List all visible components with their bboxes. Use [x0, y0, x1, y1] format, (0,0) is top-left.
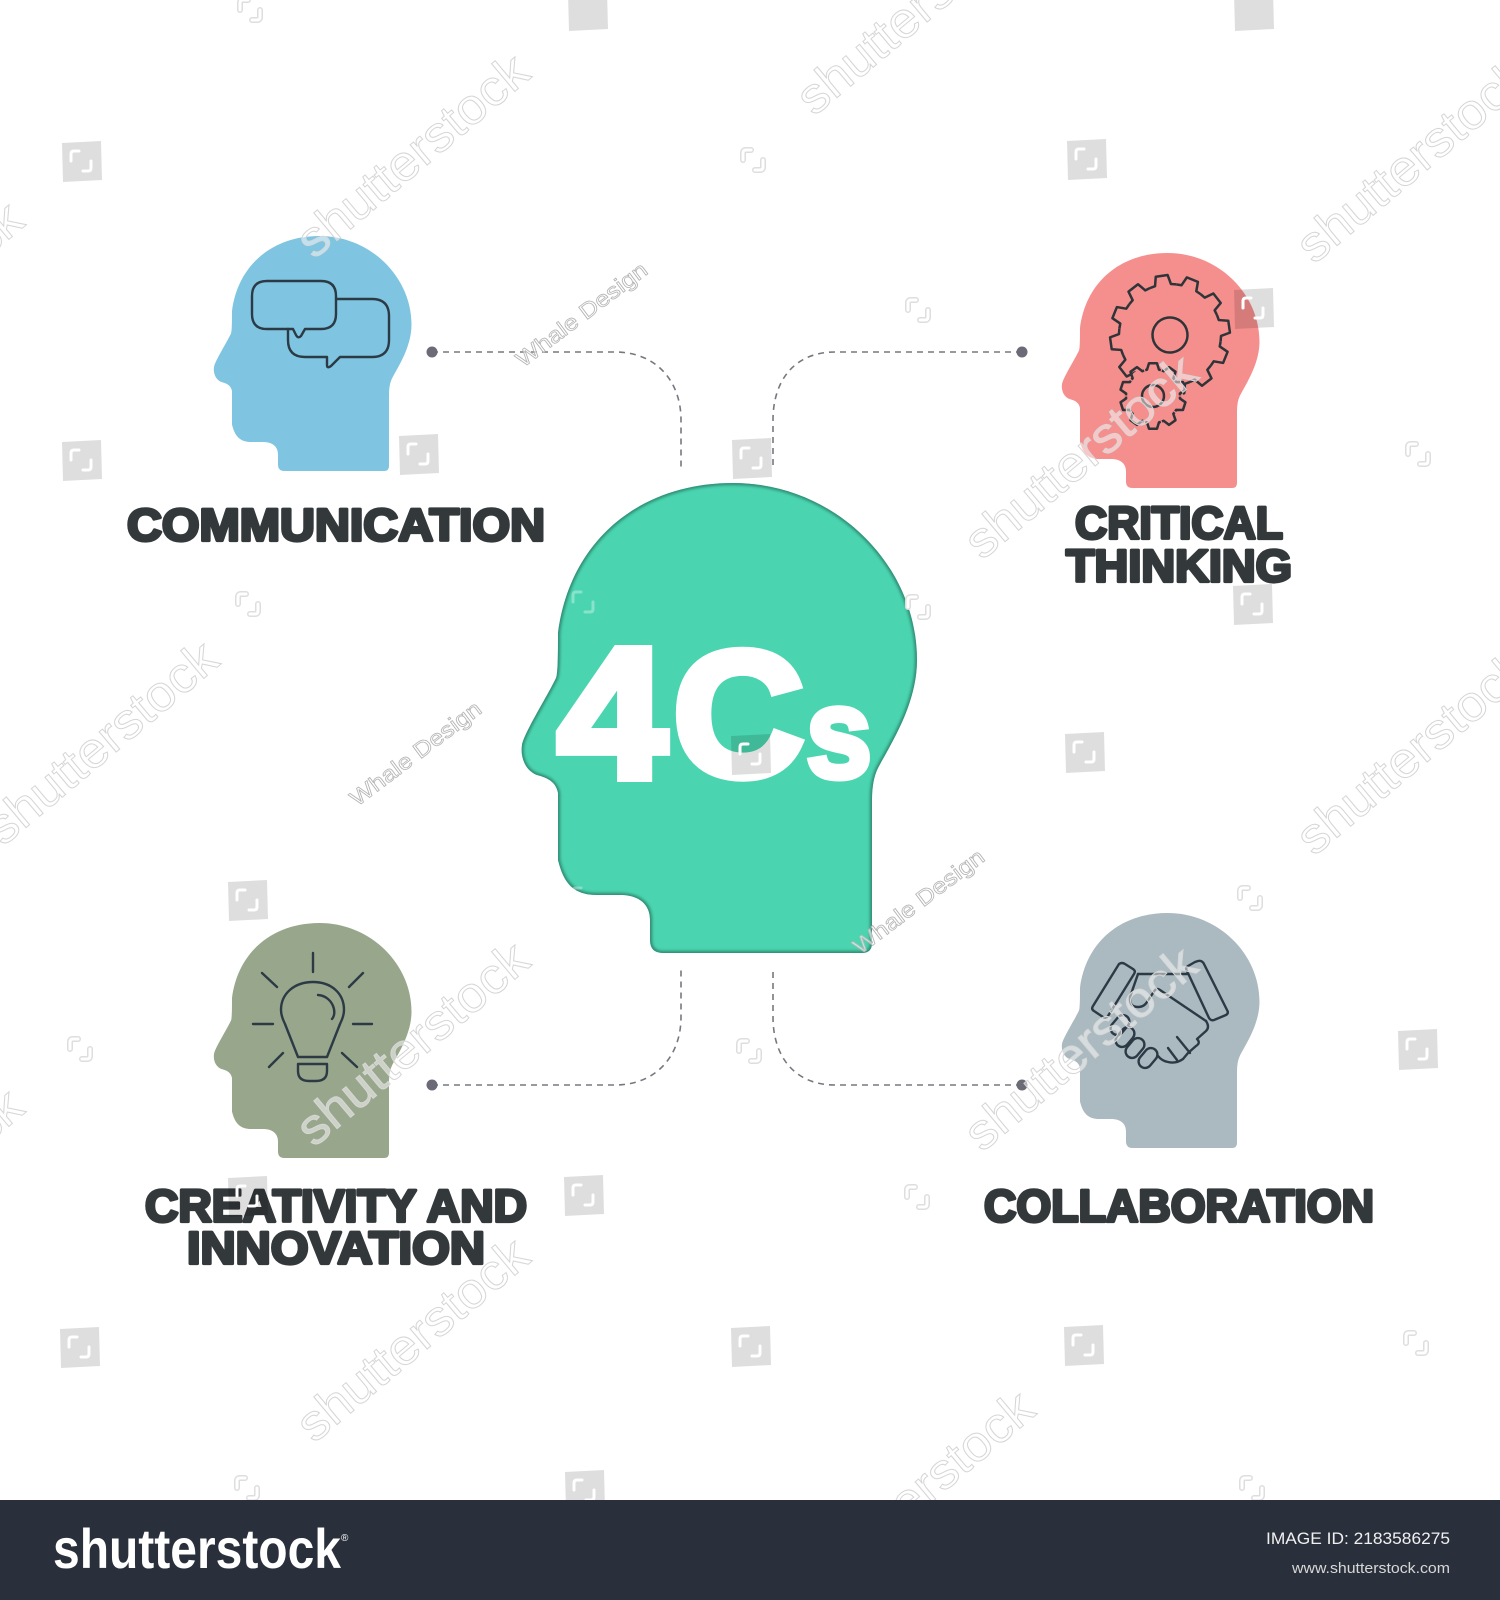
watermark text: shutterstock: [953, 935, 1208, 1161]
central title 4Cs: s: [806, 662, 872, 806]
watermark text: Whale Design: [511, 257, 652, 372]
connector: creativity and innovation: [426, 968, 681, 1090]
central title 4Cs: [558, 610, 872, 818]
connector: critical thinking: [773, 346, 1028, 470]
icon: handshake: [1092, 961, 1228, 1071]
central head: [522, 483, 917, 953]
watermark text: Whale Design: [848, 844, 989, 959]
head: creativity and innovation: [214, 923, 412, 1158]
watermark text: shutterstock: [285, 1226, 540, 1452]
watermark text: Whale Design: [345, 696, 486, 811]
head: communication: [214, 236, 412, 471]
label: creativity and innovation: CREATIVITY AND: [145, 1180, 527, 1232]
label: creativity and innovation: [145, 1180, 527, 1274]
connector: communication: [426, 346, 681, 470]
watermark text: shutterstock: [285, 930, 540, 1156]
icon: speech bubbles: [252, 281, 389, 367]
central title 4Cs: 4: [558, 610, 666, 818]
footer image id: IMAGE ID: 2183586275: [1266, 1530, 1450, 1548]
footer logo: ®: [341, 1533, 349, 1544]
watermark text: shutterstock: [790, 1379, 1045, 1600]
central title 4Cs: C: [673, 614, 804, 814]
label: critical thinking: CRITICAL: [1075, 498, 1283, 548]
label: collaboration: COLLABORATION: [984, 1180, 1374, 1232]
label: critical thinking: [1066, 498, 1292, 592]
icon: gears: [1103, 268, 1237, 429]
label: creativity and innovation: INNOVATION: [187, 1222, 485, 1274]
head: critical thinking: [1062, 253, 1260, 488]
connector: collaboration: [773, 968, 1028, 1090]
label: critical thinking: THINKING: [1066, 540, 1292, 592]
footer url: www.shutterstock.com: [1291, 1560, 1450, 1577]
icon: light bulb: [253, 953, 372, 1081]
footer logo: shutterstock: [53, 1517, 342, 1580]
footer band: [0, 1500, 1500, 1600]
head: collaboration: [1062, 913, 1260, 1148]
label: communication: COMMUNICATION: [127, 500, 545, 550]
watermark text: shutterstock: [285, 42, 540, 268]
watermark text: shutterstock: [953, 343, 1208, 569]
